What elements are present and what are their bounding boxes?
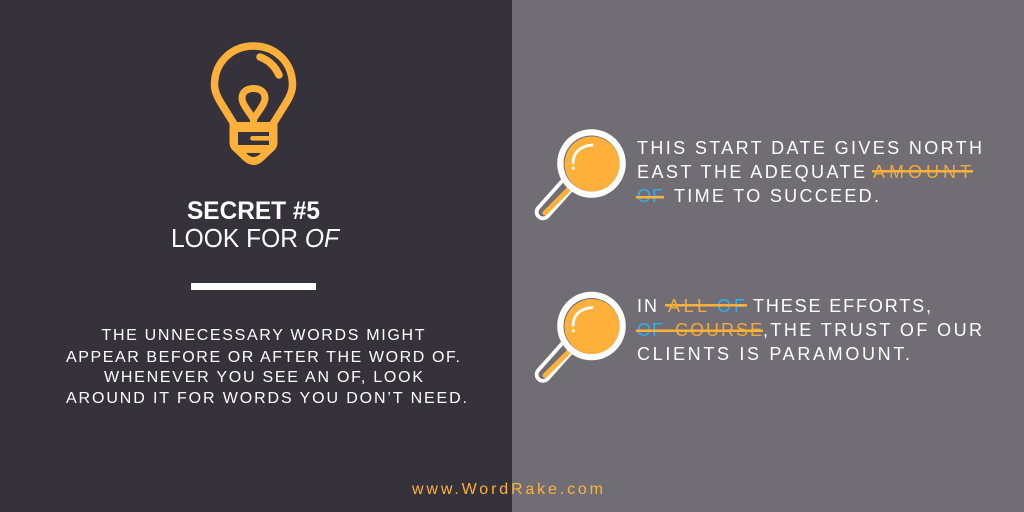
text block: example 1: THIS START DATE GIVES NORTH <box>637 138 982 158</box>
website url: www.WordRake.com <box>411 481 603 498</box>
panel: right grey background <box>512 0 1024 512</box>
heading: look for of: LOOK FOR OF <box>171 223 341 253</box>
text block: example 1: AMOUNT <box>873 162 971 182</box>
icon: magnifying glass 1 <box>543 129 626 213</box>
heading: secret number: SECRET #5 <box>187 197 320 225</box>
text block: explanation <box>66 327 467 407</box>
text block: example 2: COURSE <box>675 320 762 340</box>
icon: magnifying glass 2 <box>543 292 626 376</box>
text block: example 1: TIME TO SUCCEED. <box>674 186 879 206</box>
text block: example 1: OF <box>637 186 663 206</box>
text block: example 1: EAST THE ADEQUATE <box>637 162 865 182</box>
text block: example 2: ALL <box>668 296 707 316</box>
text block: example 2: OF <box>637 320 663 340</box>
panel: left dark background <box>0 0 512 512</box>
text block: example 2 <box>636 296 982 364</box>
text block: example 2: CLIENTS IS PARAMOUNT. <box>637 344 910 364</box>
text block: explanation: APPEAR BEFORE OR AFTER THE WORD OF. <box>66 349 460 366</box>
text block: example 2: ,THE TRUST OF OUR <box>763 320 982 340</box>
text block: example 1 <box>636 138 982 206</box>
divider bar <box>191 283 316 290</box>
text block: example 2: THESE EFFORTS, <box>753 296 931 316</box>
icon: light bulb <box>214 46 292 165</box>
text block: example 2: IN <box>637 296 657 316</box>
text block: explanation: AROUND IT FOR WORDS YOU DON’T NEED. <box>66 390 467 407</box>
text block: explanation: WHENEVER YOU SEE AN OF, LOOK <box>104 369 423 386</box>
text block: explanation: THE UNNECESSARY WORDS MIGHT <box>102 327 425 344</box>
text block: example 2: OF <box>717 296 745 316</box>
